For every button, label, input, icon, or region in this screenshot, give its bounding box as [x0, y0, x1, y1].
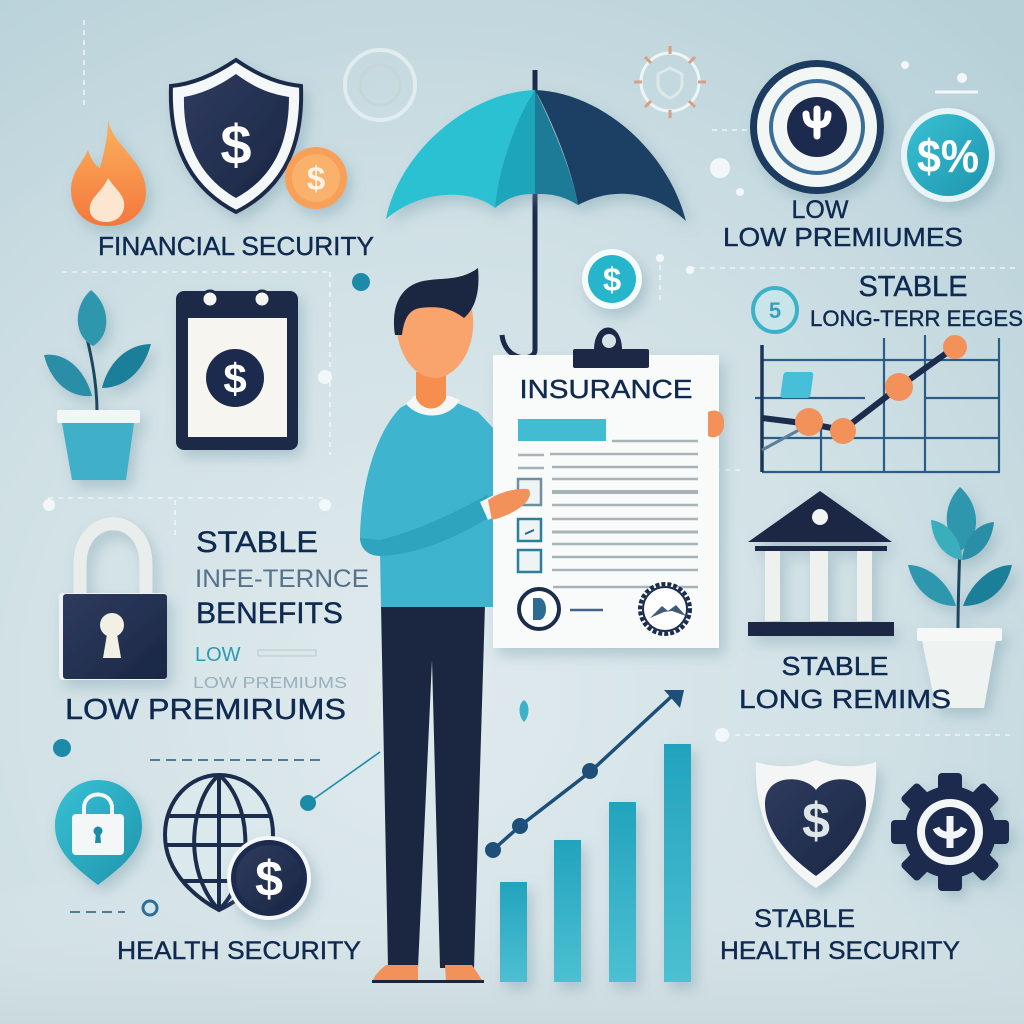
heading: low premiums: LOW PREMIUMES — [723, 224, 963, 252]
document title: INSURANCE — [520, 374, 692, 404]
heading: stable long premiums — [739, 651, 951, 714]
heading: stable long-term: STABLE — [858, 271, 968, 303]
heading: financial security: FINANCIAL SECURITY — [98, 233, 374, 261]
person — [360, 268, 495, 983]
heading: low premiums left: LOW PREMIRUMS — [65, 694, 346, 726]
person: legs — [381, 605, 485, 968]
text block: stable benefits: LOW — [195, 644, 241, 666]
icon: pillars bank — [748, 491, 894, 636]
icon: dollar percent badge: $% — [917, 130, 979, 182]
heading: low premiums — [723, 196, 963, 252]
icon: potted plant left — [44, 290, 151, 480]
text block: stable benefits: STABLE — [196, 526, 318, 559]
heading: stable health security: HEALTH SECURITY — [720, 937, 960, 965]
heading: health security: HEALTH SECURITY — [117, 937, 361, 965]
icon: teal pin with lock — [55, 780, 142, 885]
icon: small clock badge: 5 — [769, 298, 781, 323]
icon: potted plant right — [908, 487, 1012, 708]
trend arrow — [485, 690, 684, 858]
icon: small clock badge — [753, 288, 797, 332]
icon: globe — [165, 775, 273, 910]
person: head — [396, 297, 473, 378]
person: shoes — [372, 965, 484, 983]
heading: stable long-term — [810, 271, 1023, 331]
person: collar — [406, 396, 460, 416]
small dollar badge: $ — [603, 261, 621, 298]
round stamp — [519, 589, 603, 629]
icon: shield with dollar: $ — [220, 113, 252, 176]
icon: dark dollar coin: $ — [255, 851, 283, 907]
person: thumb on document — [708, 410, 724, 437]
text block: stable benefits — [193, 526, 369, 692]
icon: dark dollar coin — [227, 836, 311, 920]
icon: shield with dollar — [171, 60, 301, 212]
text block: stable benefits: INFE-TERNCE — [195, 565, 369, 593]
icon: heart shield — [756, 760, 876, 888]
insurance document — [493, 328, 724, 648]
person: hair — [394, 268, 478, 335]
small dollar badge — [582, 249, 642, 309]
icon: heart shield: $ — [802, 793, 830, 849]
teal highlight — [518, 419, 606, 441]
text block: stable benefits: LOW PREMIUMS — [193, 675, 347, 692]
clipboard clip — [573, 328, 649, 368]
heading: stable long premiums: LONG REMIMS — [739, 684, 951, 714]
icon: orange coin — [285, 147, 347, 209]
decorative connectors — [48, 20, 1020, 735]
icon: orange coin: $ — [307, 160, 325, 197]
icon: flame — [71, 120, 146, 226]
bar chart — [500, 744, 691, 982]
icon: faint gear — [634, 46, 706, 118]
heading: stable health security: STABLE — [754, 905, 855, 933]
heading: stable health security — [720, 905, 960, 965]
umbrella — [386, 70, 686, 358]
icon: padlock — [59, 524, 167, 680]
icon: concentric target — [750, 60, 884, 194]
icon: gear — [891, 773, 1009, 891]
person: neck — [416, 372, 446, 408]
person: sweater — [360, 400, 495, 607]
gear seal — [640, 584, 690, 634]
small teal marker — [520, 700, 528, 722]
text block: stable benefits: BENEFITS — [196, 597, 343, 630]
icon: calendar with dollar: $ — [223, 355, 247, 402]
heading: stable long-term: LONG-TERR EEGES — [810, 306, 1023, 331]
icon: dollar percent badge — [901, 108, 995, 202]
icon: calendar with dollar — [176, 291, 298, 450]
person: front arm and hand over document — [480, 489, 530, 520]
heading: stable long premiums: STABLE — [782, 651, 888, 681]
heading: low premiums: LOW — [792, 196, 849, 224]
form lines — [518, 441, 698, 587]
checkboxes — [518, 479, 541, 572]
line chart — [755, 335, 1000, 472]
icon: faint top badge — [345, 50, 415, 120]
